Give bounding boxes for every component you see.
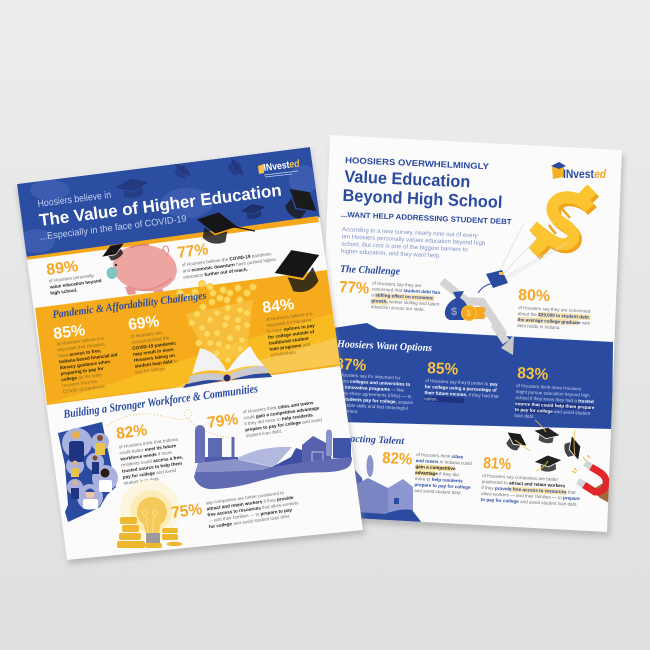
stat: 69 percent: to	[172, 358, 178, 364]
stat: 69 percent: concerned that the	[131, 335, 170, 345]
stat: 77 percent challenge: stifling effect on economic	[375, 292, 434, 301]
stat: 77 percent: further out of reach.	[204, 267, 248, 277]
stat: 85 percent: their future income,	[424, 390, 467, 397]
stat: 79 percent: gain a competitive advantage	[255, 405, 320, 419]
stat: 85 percent: as the state	[77, 372, 103, 380]
stat: 75 percent: — and their families — to	[208, 511, 261, 523]
stat: 84 percent: scholarships.	[270, 349, 297, 358]
stat: 77 percent: and	[182, 268, 192, 274]
stat: 87 percent: — like	[390, 387, 405, 393]
stat: 69 percent: may result in more	[133, 347, 174, 357]
stat: 85 percent: have	[58, 352, 70, 358]
stat: 82 percent workforce: of Hoosiers think that Indiana	[118, 437, 179, 449]
stat: 87 percent: offer innovative programs	[333, 384, 391, 392]
stat: 89 percent: of Hoosiers personally	[48, 273, 95, 283]
stat: 83 percent: loan debt.	[514, 413, 535, 419]
icon: open book	[183, 346, 272, 388]
stat: 82 percent workforce	[115, 422, 186, 486]
stat: 82 percent workforce: student loan debt.	[123, 476, 160, 486]
stat: 77 percent challenge: worker skilling and talent	[388, 299, 440, 307]
illustration: parachute strings and dollar sign	[478, 189, 594, 293]
logo: INvested right	[551, 162, 606, 179]
right heading	[341, 155, 515, 226]
stat: 83 percent: and avoid student	[553, 409, 591, 416]
stat: 84 percent	[262, 298, 315, 357]
stat: 85 percent: of Hoosiers believe it is	[56, 336, 105, 346]
stat: 87 percent: students pay for college, acquire	[343, 396, 413, 405]
stat: 82 percent workforce: if more	[156, 450, 173, 457]
stat: 77 percent challenge: 77%	[339, 279, 370, 298]
stat: 80 percent debt: $29,000 in student debt	[538, 312, 590, 320]
panel: right page	[310, 135, 624, 537]
stat: 77 percent challenge	[340, 281, 440, 311]
stat: 85 percent	[54, 324, 118, 393]
dollar sign icon	[533, 189, 594, 255]
stat: 75 percent: that allow workers	[260, 500, 300, 510]
stat: 82 percent talent: help residents	[432, 477, 463, 484]
panel: hoosiers want options band	[310, 323, 613, 429]
stat: 84 percent: 84%	[261, 296, 295, 317]
stat: 81 percent talent: attract and retain workers	[509, 480, 566, 488]
stat: 84 percent: to have	[267, 327, 284, 334]
stat: 81 percent talent: prepare	[563, 495, 580, 501]
stat: 77 percent challenge: attraction across our state.	[371, 304, 425, 312]
stat: 85 percent: literacy guidance when	[60, 359, 110, 370]
stat: 83 percent	[514, 367, 594, 418]
stat: 85 percent: if they had that	[467, 392, 500, 399]
stat: 79 percent	[206, 399, 323, 438]
stat: 84 percent: for college outside of	[268, 329, 315, 340]
stat: 69 percent: pay for college.	[135, 366, 167, 375]
heading: stronger workforce: Building a Stronger Workforce & Communities	[62, 381, 259, 421]
stat: 87 percent	[339, 358, 413, 414]
stat: 80 percent debt	[517, 287, 591, 332]
stat: 82 percent workforce: meet its future	[144, 443, 177, 452]
panel: header band	[17, 147, 320, 260]
stat: 77 percent challenge: student debt has	[403, 288, 441, 295]
stat: 69 percent: 69%	[127, 313, 160, 334]
stat: 85 percent: college	[61, 375, 78, 382]
logo: INvested left: INvested	[263, 158, 301, 174]
stat: 79 percent: and avoid	[301, 417, 323, 425]
stat: 89 percent: high school.	[50, 287, 78, 296]
stat: 82 percent workforce: 82%	[115, 422, 148, 443]
stat: 75 percent: for college	[209, 521, 233, 529]
heading: the challenge: The Challenge	[340, 264, 401, 278]
stat: 84 percent: important for Hoosiers	[266, 317, 312, 328]
stat: 85 percent: Indiana-based financial aid	[59, 352, 118, 364]
stat: 79 percent: student loan debt.	[246, 428, 283, 438]
stat: 81 percent talent: provide free access to resources that	[495, 486, 576, 495]
icons: graduation caps in header	[115, 156, 323, 247]
icon: money bag and coins	[445, 291, 486, 320]
stat: 81 percent talent	[481, 455, 581, 507]
stat: 87 percent: income-share agreements (ISAs) — to	[333, 390, 412, 399]
stat: 83 percent: might pursue education beyond high	[516, 389, 590, 398]
icon: money bag and coins: $	[466, 309, 472, 318]
stat: 79 percent: cities and towns	[278, 400, 314, 410]
illustration: hill town	[355, 455, 422, 523]
stat: 80 percent debt: about the	[518, 311, 538, 317]
stat: 75 percent: prepare to pay	[260, 507, 293, 516]
stat: 85 percent: COVID-19 pandemic.	[63, 384, 106, 394]
stat: 85 percent: option.	[424, 396, 438, 402]
stat: 75 percent: and avoid student loan debt.	[232, 513, 291, 526]
stat: 79 percent: prepare to pay for college	[245, 420, 302, 432]
stat: 82 percent workforce: and avoid	[155, 468, 177, 475]
stat: 83 percent: school if they knew they had a	[515, 395, 578, 403]
stat: 75 percent: if they provide	[263, 495, 294, 504]
stat: 81 percent talent: positioned to	[482, 479, 509, 485]
arrow over band	[494, 324, 514, 355]
logo: INvested right: INvested	[563, 167, 607, 181]
intro paragraph: ten Hoosiers personally values education beyond high	[342, 234, 485, 247]
stat: 75 percent: say companies are better positioned to	[205, 490, 285, 505]
intro paragraph: higher education, and they want help.	[341, 249, 441, 260]
stat: 82 percent workforce: pay for college	[123, 470, 156, 480]
stat: 85 percent: recovers from the	[62, 379, 98, 388]
right heading: HOOSIERS OVERWHELMINGLY	[345, 155, 489, 171]
stat: 82 percent talent: if they did	[438, 471, 459, 477]
stat: 81 percent talent: allow workers — and their families — to	[481, 491, 563, 500]
stat: 82 percent workforce: could better	[119, 447, 145, 456]
stat: 80 percent debt: of Hoosiers say they are concerned	[518, 305, 591, 314]
stat: 87 percent: colleges and universities to	[350, 379, 411, 387]
stat: 80 percent debt: 80%	[518, 287, 550, 305]
stat: 87 percent: marketable skills and find meaningful	[332, 402, 408, 411]
stat: 85 percent: 85%	[52, 322, 86, 343]
stat: 77 percent: economic downturn have pushed higher	[191, 257, 276, 273]
stat: 82 percent workforce: access a free,	[153, 454, 183, 463]
title block: ...Especially in the face of COVID-19	[39, 214, 187, 243]
stat: 77 percent: 77%	[176, 241, 209, 262]
coins rising from book	[177, 281, 256, 363]
stat: 81 percent talent: of Hoosiers say companies are better	[482, 473, 559, 482]
stat: 85 percent: 85%	[427, 360, 459, 379]
title block: The Value of Higher Education	[38, 181, 283, 230]
stat: 82 percent talent: gain a competitive	[415, 464, 456, 471]
stat: 82 percent talent: in Indiana could	[438, 459, 472, 466]
stat: 69 percent: student loan debt	[134, 359, 173, 369]
heading: pandemic challenges: Pandemic & Affordability Challenges	[52, 290, 207, 321]
icon: money bag and coins: $	[451, 306, 457, 318]
stat: 84 percent: of Hoosiers believe it is	[265, 311, 314, 322]
intro paragraph: school. But cost is one of the biggest barriers to	[341, 242, 468, 254]
stat: 75 percent: attract and retain workers	[206, 499, 263, 511]
stat: 87 percent: Indiana	[334, 378, 350, 384]
right heading: Beyond High School	[342, 186, 503, 212]
stat: 85 percent	[424, 362, 498, 404]
panel: pandemic and affordability	[35, 270, 340, 405]
stat: 85 percent: preparing to pay for	[60, 366, 104, 376]
stat: 85 percent: access to free,	[69, 348, 101, 357]
stat: 85 percent: for college using a percentage of	[425, 384, 497, 393]
stat: 77 percent challenge: growth,	[371, 298, 388, 304]
stat: 83 percent: of Hoosiers think more Hoosiers	[516, 383, 582, 391]
stat: 83 percent: trusted	[578, 398, 594, 404]
panel: left page	[17, 147, 365, 564]
icon: graduation caps and magnet	[501, 420, 612, 504]
stat: 82 percent workforce: workforce needs	[119, 452, 157, 462]
stat: 81 percent talent: if they	[481, 485, 495, 491]
stat: 81 percent talent: to pay for college	[481, 497, 519, 504]
stat: 69 percent: of Hoosiers are	[130, 330, 162, 339]
stat: 77 percent: education	[183, 272, 205, 280]
stat: 82 percent talent: and towns	[416, 458, 439, 464]
stat: 77 percent: of Hoosiers believe the	[181, 257, 230, 267]
arrow: gray path	[442, 281, 504, 335]
stat: 85 percent: of Hoosiers say they'd prefer to	[425, 378, 490, 386]
stat: 80 percent debt: with	[581, 320, 591, 326]
illustration: lightbulb and coins	[117, 480, 182, 548]
stat: 82 percent workforce: trusted source to help them	[122, 461, 182, 474]
stat: 87 percent: 87%	[335, 356, 367, 375]
stat: 87 percent: help	[333, 396, 343, 401]
stat: 85 percent: pay	[490, 381, 498, 387]
stat: 80 percent debt: debt holds in Indiana.	[517, 323, 561, 330]
heading: want options: Hoosiers Want Options	[336, 339, 432, 354]
stat: 82 percent workforce: residents could	[121, 458, 153, 468]
stat: 84 percent: loan programs	[269, 343, 302, 352]
stat: 69 percent: COVID-19 pandemic	[132, 340, 177, 351]
stat: 77 percent challenge: concerned that	[372, 286, 404, 293]
stat: 82 percent talent	[382, 450, 473, 496]
stat: 75 percent: 75%	[170, 501, 203, 522]
heading: attracting talent: Attracting Talent	[333, 433, 406, 447]
stat: 82 percent talent: 82%	[382, 450, 413, 469]
stat: 82 percent talent: of Hoosiers think	[416, 452, 452, 459]
stat: 77 percent challenge: of Hoosiers say they are	[372, 281, 422, 288]
title block: Hoosiers believe in	[37, 190, 112, 210]
stat: 79 percent: could	[243, 414, 256, 420]
stat: 80 percent debt: the average college graduate	[517, 317, 581, 325]
stat: 89 percent	[45, 258, 103, 296]
right heading: Value Education	[344, 167, 471, 191]
stat: 87 percent: of Hoosiers say it's important for	[335, 372, 401, 380]
stat: 82 percent talent: prepare to pay for college	[414, 482, 471, 490]
stat: 79 percent: of Hoosiers think	[242, 405, 278, 414]
stat: 77 percent challenge: a	[371, 292, 375, 297]
icon: piggy bank	[102, 243, 177, 295]
stat: 69 percent	[127, 313, 180, 375]
stat: 75 percent: free access to resources	[207, 505, 262, 517]
stat: 69 percent: Hoosiers taking on	[134, 353, 175, 363]
right heading: ...WANT HELP ADDRESSING STUDENT DEBT	[341, 210, 512, 226]
stat: 82 percent talent: advantage	[415, 470, 438, 476]
stat: 77 percent: COVID-19 pandemic	[229, 251, 272, 261]
stat: 82 percent talent: cities	[451, 454, 464, 459]
stat: 82 percent talent: more to	[415, 476, 432, 482]
illustration: farm and town	[194, 425, 352, 489]
stat: 77 percent	[177, 244, 276, 279]
stat: 79 percent: if they did more to	[244, 416, 282, 426]
stat: 85 percent: important that Hoosiers	[57, 341, 106, 352]
stat: 84 percent: traditional student	[269, 336, 309, 346]
stat: 79 percent: 79%	[206, 411, 239, 432]
stat: 83 percent: 83%	[517, 365, 549, 384]
stat: 84 percent: options to pay	[283, 323, 315, 332]
stat: 87 percent: employment.	[332, 408, 359, 414]
stat: 79 percent: help residents	[282, 412, 313, 421]
big graduation cap	[274, 250, 320, 292]
intro paragraph: According to a new survey, nearly nine out of every	[342, 227, 478, 239]
dotted connector	[108, 410, 230, 438]
stat: 84 percent: and	[301, 342, 311, 348]
stat: 89 percent: 89%	[45, 258, 79, 279]
stat: 81 percent talent: and avoid student loan debt.	[519, 499, 578, 507]
stat: 82 percent talent: and avoid student debt.	[414, 488, 462, 495]
stat: 75 percent	[170, 488, 301, 529]
stat: 83 percent: to pay for college	[515, 407, 553, 414]
stat: 83 percent: source that could help them prepare	[515, 401, 595, 410]
stat: 89 percent: value education beyond	[49, 278, 102, 290]
stat: 81 percent talent: 81%	[483, 455, 512, 473]
illustration: Indiana state with workers	[58, 422, 118, 522]
